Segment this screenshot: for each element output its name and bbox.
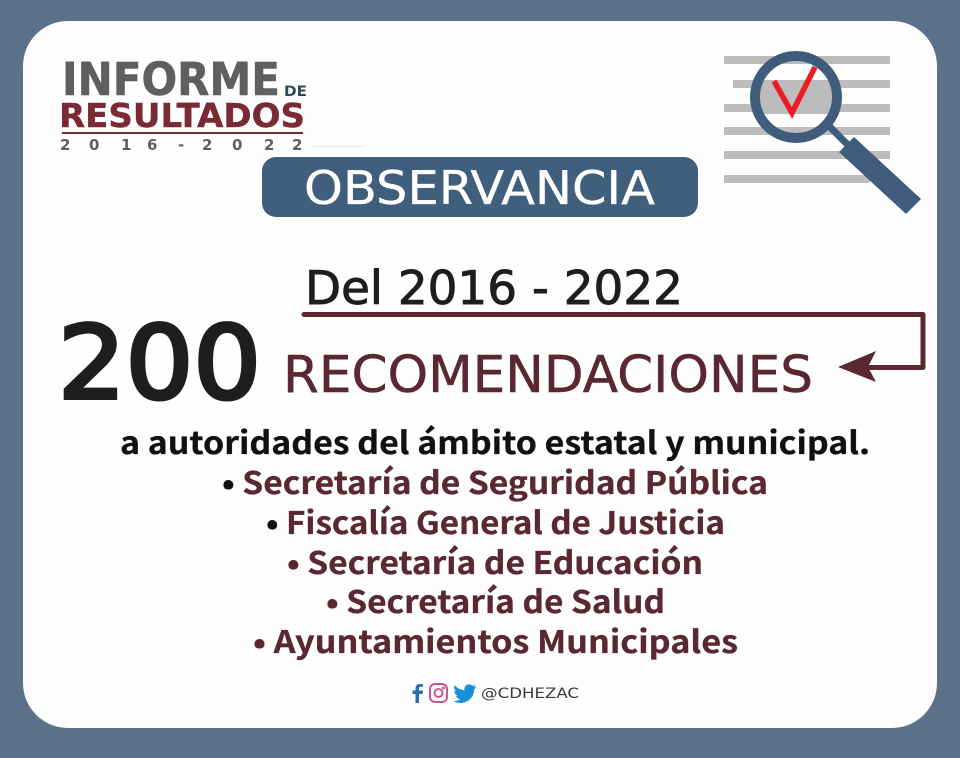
arrow: from date range to recomendaciones: [304, 314, 923, 382]
icon: instagram: [430, 684, 447, 702]
heading: Observancia pill: [262, 157, 698, 217]
text block: authorities list: • Secretaría de Educación: [287, 538, 703, 583]
logo: Informe de Resultados 2016-2022: INFORME: [62, 53, 280, 106]
text block: authorities list: • Secretaría de Salud: [326, 577, 665, 622]
logo: Informe de Resultados 2016-2022: DE: [284, 84, 307, 100]
icon: facebook: [412, 684, 423, 703]
text: handle: @CDHEZAC: [481, 686, 579, 702]
footer: social media handle: [412, 684, 579, 703]
logo: Informe de Resultados 2016-2022: [59, 53, 365, 154]
stat: 200: 200: [58, 304, 261, 422]
text: date range: Del 2016 - 2022: [305, 261, 683, 315]
icon: magnifying glass over document: [724, 56, 921, 214]
text block: authorities list: a autoridades del ámbito estatal y municipal.: [120, 418, 870, 463]
logo: Informe de Resultados 2016-2022: RESULTADOS: [59, 96, 305, 135]
text block: authorities list: • Ayuntamientos Municipales: [253, 617, 738, 662]
text block: authorities list: • Secretaría de Seguridad Pública: [222, 458, 768, 503]
logo: Informe de Resultados 2016-2022: 2016-2022: [60, 136, 302, 154]
heading: Observancia pill: OBSERVANCIA: [304, 161, 656, 215]
text block: authorities list: [120, 418, 870, 662]
text block: authorities list: • Fiscalía General de Justicia: [266, 498, 725, 543]
text: recomendaciones: RECOMENDACIONES: [283, 346, 813, 405]
icon: twitter: [453, 684, 476, 703]
